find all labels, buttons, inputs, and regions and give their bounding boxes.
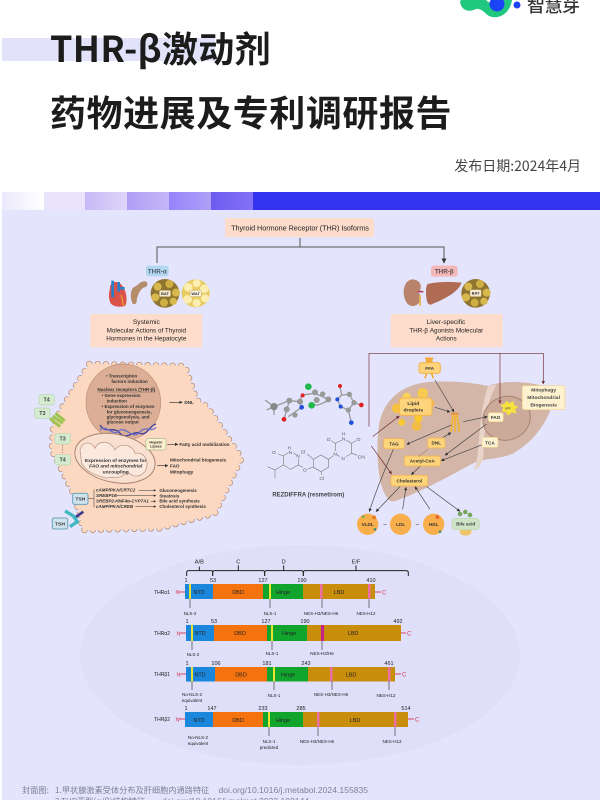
residue numbers: 106 [211,661,221,667]
TSH pathways: cAMP/PKA/CRTC2 [96,488,136,493]
label: FFA transporter: FFA [425,366,435,371]
structure: THRα1: N [176,590,180,596]
bar: NTD [193,590,205,596]
title highlight [2,38,215,61]
residue numbers [185,661,394,667]
T3 chip inner [55,434,70,444]
signal annotations: NES-H12 [376,693,396,698]
bar [185,584,375,599]
liver shape [377,381,556,502]
nucleus: induction [107,398,127,403]
signal annotations: NES-H3/NES-H6 [300,739,335,744]
residue numbers: 127 [261,619,271,625]
bar: NTD [194,672,206,678]
domain letters: C [236,560,240,566]
icon: WAT tissue: WAT [191,291,200,296]
domain letters: D [282,560,286,566]
drug name: REZDIFFRA (resmetirom) [272,492,344,498]
box: liver-specific actions: Actions [436,335,457,342]
title: THR-β激动剂 [50,21,271,73]
nucleus [86,364,161,441]
signal annotations: NES-H12 [382,739,402,744]
publish date: 发布日期:2024年4月 [454,156,581,176]
signal annotations: NLS-1 [268,693,281,698]
structure: THRα2: THRα2 [154,631,170,637]
arrow: mitochondrial outcomes: Mitochondrial biogenesis [170,458,227,463]
structure: THRα1 [154,578,387,616]
signal annotations: NLS-1 [263,739,276,744]
label: lipid droplets: droplets [403,408,423,414]
label: TAG: TAG [389,441,399,446]
signal annotations: NES-H12 [356,611,376,616]
particle: LDL: LDL [396,522,405,527]
2D structure: resmetirom: Cl [301,449,305,455]
arrow: mitochondrial outcomes: FAO [170,463,180,468]
residue numbers [184,706,411,712]
signal annotations: equivalent [188,741,209,746]
signal annotations: NLS-2 [184,611,197,616]
2D structure: resmetirom: O [327,437,331,443]
2D structure: resmetirom: O [303,467,307,473]
icon: bone [131,281,147,304]
label: DNL [428,438,445,448]
nucleus: factors induction [111,379,148,384]
2D structure: resmetirom: N [342,437,345,442]
label: bile acid [452,510,479,536]
icon: ATP burst: ATP [505,406,511,410]
bar: Hinge [281,672,295,678]
TSH pathways: Bile acid synthesis [159,499,200,504]
bar: DBD [232,718,244,724]
2D structure: resmetirom: N [341,456,345,461]
panel: hepatocyte diagram [35,364,242,530]
panel: THR-alpha header [90,266,210,347]
bar: LBD [334,590,344,596]
label: Acetyl-CoA [404,456,440,466]
footer citations [22,784,368,800]
residue numbers: 1 [185,619,189,625]
T4 chip inner [55,455,70,465]
nucleus: • Transcription [106,374,137,379]
residue numbers: 233 [258,706,268,712]
residue numbers: 147 [207,706,217,712]
logo [460,0,580,18]
label: cholesterol [391,475,428,486]
particle: HDL: HDL [429,522,439,527]
signal annotations [188,727,402,750]
arrow: mitochondrial outcomes [157,458,227,474]
drug action arrows [369,353,543,474]
TSH chip inner [73,493,88,504]
particle: HDL [423,514,444,535]
bar: LBD [348,631,358,637]
arrow: DNL [169,400,194,405]
bar: NTD [193,718,205,724]
residue numbers: 1 [184,706,188,712]
transporter [50,413,65,427]
TSH pathways: cAMP/PKA/CREB [96,504,134,509]
mitochondrion: Expression of enzymes for [85,458,146,464]
2D structure: resmetirom: N [289,450,292,455]
signal annotations: NLS-1 [264,611,277,616]
hepatic lipase chip: Lipase [150,445,162,449]
box: systemic actions: Molecular Actions of Thyroid [107,327,186,334]
label: cholesterol: Cholesterol [397,478,422,483]
residue numbers: 127 [258,578,268,584]
box: systemic actions [90,314,202,347]
label: TCA: TCA [485,440,495,445]
label: TCA [482,437,498,447]
2D structure: resmetirom: N [333,451,337,456]
label: bile acid: Bile acid [456,522,475,527]
icon: heart [109,281,127,307]
signal annotations: NLS-1 [266,651,279,656]
2D structure: resmetirom: H [342,431,345,436]
bar: LBD [346,672,356,678]
icon: kidney [404,279,423,306]
structure: THRα2 [154,619,412,657]
2D structure: resmetirom: H [288,445,291,450]
label: lipid droplets [399,398,432,415]
panel: liver pathway [265,353,565,536]
particle: VLDL [357,514,378,535]
nucleus: Nuclear receptors (THR-β) [97,387,156,392]
header [2,0,581,176]
structure: THRβ2: N [176,718,180,724]
bar [186,625,401,641]
nucleus: • Expression of enzymes [102,404,155,409]
bar [185,712,408,727]
mitochondrion: FAO and mitochondrial [89,463,143,469]
top box: THR isoforms: Thyroid Hormone Receptor (THR) Isoforms [231,224,369,232]
THR-alpha chip: THR-α [148,268,167,275]
bar: DBD [232,590,244,596]
2D structure: resmetirom: Cl [319,476,324,482]
label: mitophagy and biogenesis: Mitochondrial [527,395,561,401]
nucleus: glycogenolysis, and [107,414,150,419]
nucleus: for gluconeogenesis, [107,409,152,414]
domain letters: A/B [195,560,204,566]
T4 chip outer [39,395,54,405]
arrow: mitochondrial outcomes: Mitophagy [170,469,194,474]
residue numbers: 492 [393,619,403,625]
residue numbers: 285 [296,706,306,712]
2D structure: resmetirom: O [357,437,361,443]
icon: ATP burst [500,401,518,416]
particle: VLDL: VLDL [362,522,374,527]
T3 chip outer: T3 [39,411,45,417]
structure: THRβ1 [154,661,407,703]
3D molecule [265,383,364,425]
signal annotations: No-NLS-2 [188,735,208,740]
structure: THRα1: C [382,590,387,596]
2D structure: resmetirom: N [296,454,300,459]
label: FFA transporter [419,358,440,378]
signal annotations: equivalent [182,698,203,703]
box: systemic actions: Systemic [133,319,160,326]
TSH receptor [65,511,83,527]
signal annotations: NES-H3/NES-H6 [314,692,349,697]
signal annotations: NES-H3/NES-H6 [304,611,339,616]
label: FAO: FAO [491,415,501,420]
nucleus: glucose output [107,420,139,425]
TSH pathways: Steatosis [159,493,180,498]
signal annotations [184,599,376,616]
structure: THRα2: N [176,632,180,638]
residue numbers: 243 [301,661,311,667]
box: liver-specific actions: THR-β Agonists Molecular [409,327,483,334]
arrow: DNL: DNL [184,400,194,405]
TSH chip outer [52,518,68,529]
icon: BAT tissue: BAT [472,291,480,296]
domain letters [195,560,361,566]
TSH pathways: Cholesterol synthesis [159,504,206,509]
residue numbers [184,578,376,584]
signal annotations [182,681,396,703]
bar: LBD [350,718,360,724]
panel background [2,210,600,800]
hepatic lipase chip: Hepatic [149,440,163,444]
droplets [392,388,435,431]
label: TAG [384,439,404,449]
domain brackets [187,560,408,576]
label: mitophagy and biogenesis: Mitophagy [531,388,556,394]
particle: LDL [390,514,411,535]
T3 chip inner: T3 [60,437,66,443]
box: liver-specific actions: Liver-specific [427,319,466,326]
bar: DBD [235,672,247,678]
signal annotations [187,641,334,657]
structure: THRβ2: C [415,718,420,724]
label: FAO [488,413,503,422]
fatty acid icon [451,414,459,432]
residue numbers: 1 [184,578,188,584]
residue numbers: 1 [185,661,189,667]
nucleus: • Gene expression [102,393,141,398]
signal annotations: NES-H3/H6 [310,651,334,656]
DNA strand [100,424,156,436]
label: lipid droplets: Lipid [407,401,419,407]
bar: NTD [194,631,206,637]
structure: THRβ1: N [176,672,180,678]
residue numbers: 53 [211,619,217,625]
structure: THRα1: THRα1 [154,590,170,596]
structure oval backdrop [80,545,520,765]
T4 chip outer: T4 [44,398,50,404]
structure: THRβ2: THRβ2 [154,717,170,723]
TSH pathways: Gluconeogenesis [159,488,197,493]
TSH pathways: SREBP1C [96,493,118,498]
bar: Hinge [276,590,290,596]
panel: THR-beta header [391,266,503,347]
bar: Hinge [282,631,296,637]
label: DNL: DNL [432,441,441,446]
title: 药物进展及专利调研报告 [50,85,452,137]
structure: THRα2: C [407,632,412,638]
TSH chip outer: TSH [55,521,65,527]
residue numbers [185,619,403,625]
pathway arrows [369,380,487,512]
footer citations: doi.org/10.1016/j.metabol.2024.155835 [218,785,368,795]
bar [186,667,395,682]
footer citations: 封面图: [22,784,49,796]
box: systemic actions: Hormones in the Hepatocyte [106,335,187,342]
gradient band [2,192,600,210]
icon: liver [426,282,462,305]
2D structure: resmetirom [267,431,365,482]
T4 chip inner: T4 [60,458,66,464]
mitochondrion: uncoupling [103,469,129,475]
domain letters: E/F [352,560,361,566]
TSH chip inner: TSH [75,497,86,503]
residue numbers: 190 [297,578,307,584]
residue numbers: 190 [300,619,310,625]
structure: THRβ1: THRβ1 [154,672,170,678]
icon: BAT tissue: BAT [161,291,169,296]
title [50,21,452,137]
box: liver-specific actions [391,314,503,347]
label: Acetyl-CoA: Acetyl-CoA [410,459,435,464]
residue numbers: 410 [366,578,376,584]
TSH pathways: SREBP2-HNF4α-CYP7A1 [96,499,149,504]
arrow: fatty acid mobilization: Fatty acid mobilization [179,442,230,447]
hepatocyte cell [52,364,242,530]
2D structure: resmetirom: CN [358,454,365,460]
top box: THR isoforms [225,218,374,237]
residue numbers: 514 [401,706,411,712]
footer citations: 1.甲状腺激素受体分布及肝细胞内通路特征 [55,784,209,796]
residue numbers: 181 [262,661,272,667]
label: mitophagy and biogenesis: Biogenesis [530,402,557,408]
structure: THRβ2 [154,706,420,750]
2D structure: resmetirom: O [272,450,276,456]
mitochondrion [70,426,160,490]
signal annotations: NLS-2 [187,652,200,657]
bar: Hinge [276,718,290,724]
THR-beta chip: THR-β [435,269,454,276]
signal annotations: predicted [260,745,279,750]
structure: THRβ1: C [402,672,407,678]
label: mitophagy and biogenesis [522,386,565,410]
residue numbers: 53 [210,578,216,584]
residue numbers: 461 [384,661,394,667]
TSH pathways [88,488,206,509]
bar: DBD [234,631,246,637]
signal annotations: No-NLS-2 [182,692,202,697]
T3 chip outer [35,408,50,418]
isoform connector arrows [157,238,444,263]
hepatic lipase chip [146,439,166,450]
